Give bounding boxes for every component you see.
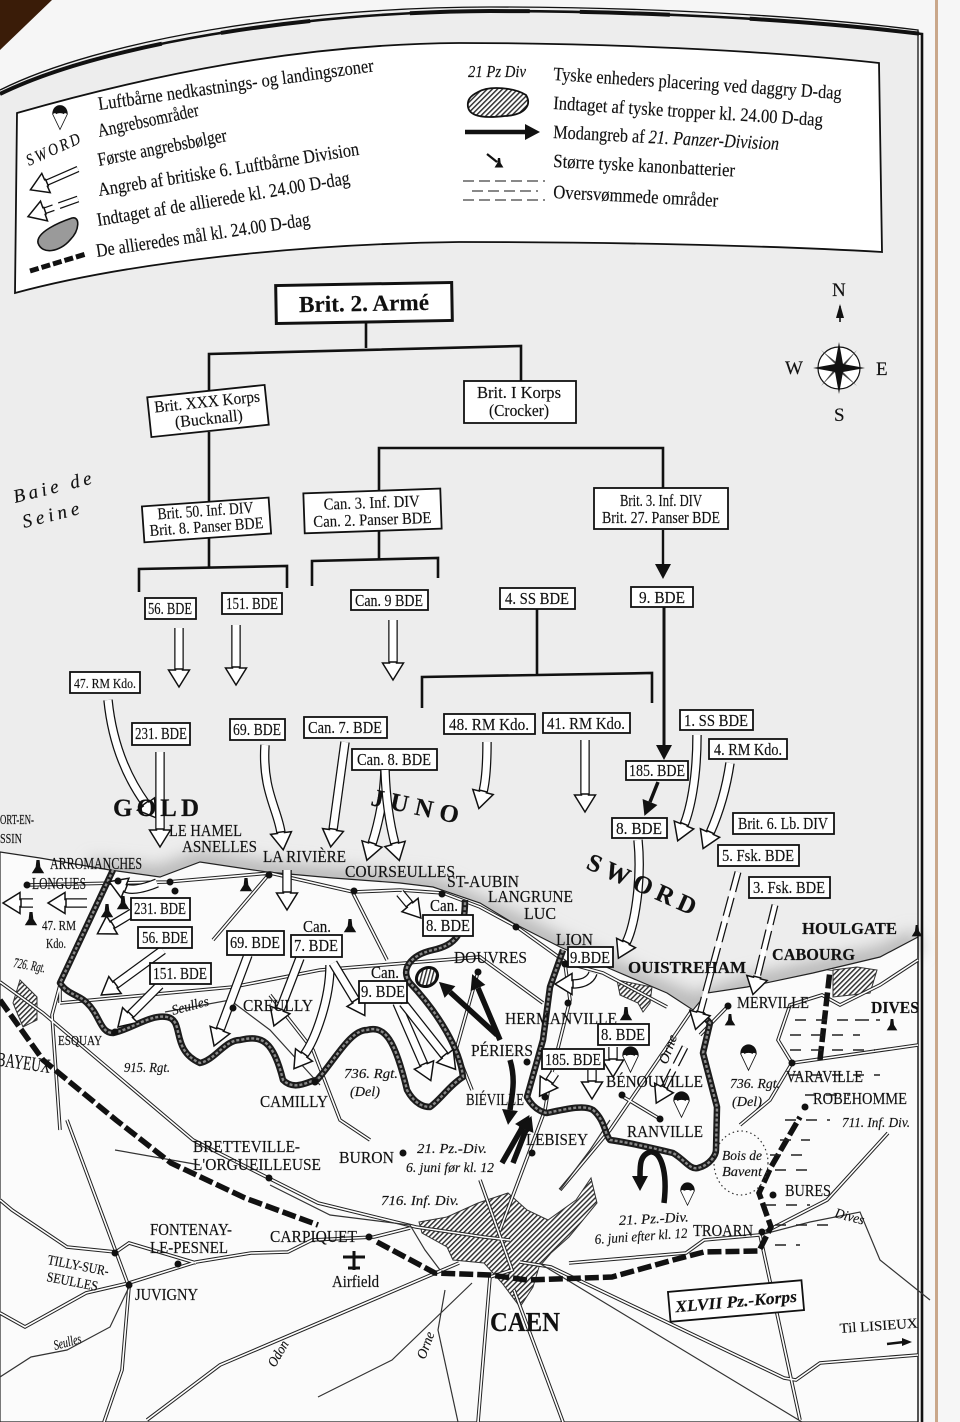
org box: Brit. I Korps: Brit. I Korps — [477, 383, 561, 402]
place names: BÉNOUVILLE — [606, 1072, 703, 1091]
place names: 47. RM — [42, 919, 76, 934]
place names: ESQUAY — [58, 1034, 102, 1049]
org box: Brit. 50. Inf. DIV — [142, 497, 271, 542]
place names: ST-AUBIN — [447, 872, 519, 891]
legend right texts — [553, 64, 843, 212]
legend unit label: 21 Pz Div — [468, 62, 527, 81]
unit and river italic labels: 6. juni før kl. 12 — [406, 1161, 494, 1176]
unit and river italic labels: 736. Rgt. — [344, 1067, 398, 1082]
unit boxes: upper brigades: 47. RM Kdo. — [74, 677, 136, 692]
unit and river italic labels: 21. Pz.-Div. — [417, 1142, 487, 1157]
sea name: Seine — [20, 497, 85, 533]
org box: Can. 3. Inf. DIV — [303, 489, 442, 533]
icon: dashed arrow legend — [44, 199, 78, 211]
place names: LANGRUNE — [488, 887, 573, 906]
place names: ORT-EN- — [0, 813, 34, 828]
enemy pocket: Douvres — [413, 964, 441, 990]
unit and river italic labels: Odon — [265, 1338, 292, 1370]
unit boxes: upper brigades: 5. Fsk. BDE — [722, 846, 794, 865]
unit boxes: upper brigades: 1. SS BDE — [684, 711, 748, 730]
unit and river italic labels: Orne — [657, 1033, 681, 1066]
unit and river italic labels: Seulles — [170, 994, 211, 1019]
unit boxes: upper brigades: 4. SS BDE — [505, 589, 569, 608]
unit boxes: upper brigades: 151. BDE — [226, 594, 278, 613]
towns hatch — [13, 964, 877, 1307]
legend right texts: Større tyske kanonbatterier — [553, 151, 736, 182]
legend left texts — [95, 55, 376, 262]
place names: HOULGATE — [802, 919, 897, 938]
place names: Can. — [303, 917, 331, 936]
beach names — [113, 784, 712, 926]
place names: CREULLY — [243, 996, 313, 1015]
place names: TROARN — [693, 1221, 753, 1240]
unit boxes: upper brigades: 69. BDE — [233, 720, 281, 739]
legend right texts: Modangreb af 21. Panzer-Division — [553, 122, 780, 155]
place names: CAMILLY — [260, 1092, 328, 1111]
map unit boxes — [131, 898, 649, 1069]
beach names: JUNO — [369, 784, 472, 832]
counterattack black arrows — [450, 782, 665, 1203]
compass letters: W — [785, 358, 803, 379]
org box: Brit. XXX Korps: (Bucknall) — [174, 405, 244, 431]
unit and river italic labels: 711. Inf. Div. — [842, 1116, 910, 1131]
icon: counterattack arrow legend — [465, 130, 525, 134]
place names: SEULLES — [45, 1270, 99, 1295]
XLVII Pz.-Korps box: XLVII Pz.-Korps — [673, 1287, 798, 1316]
compass letters: N — [832, 280, 846, 301]
org box: Brit. 3. Inf. DIV: Brit. 27. Panser BDE — [602, 508, 720, 527]
place names: LION — [556, 930, 593, 949]
place names — [0, 813, 919, 1337]
unit and river italic labels: Bois de — [722, 1149, 762, 1164]
unit and river italic labels: 6. juni efter kl. 12 — [594, 1227, 688, 1248]
org box: Brit. 2. Armé: Brit. 2. Armé — [299, 290, 429, 317]
place names: RANVILLE — [627, 1122, 703, 1141]
unit boxes: upper brigades: 41. RM Kdo. — [547, 714, 625, 733]
city: Caen — [419, 1178, 597, 1307]
map unit boxes: 185. BDE — [545, 1050, 601, 1069]
place names: PÉRIERS — [471, 1041, 533, 1060]
unit and river italic labels: Orne — [415, 1330, 438, 1361]
legend left texts: Angreb af britiske 6. Luftbårne Division — [96, 139, 361, 201]
map unit boxes: 7. BDE — [294, 936, 338, 955]
legend left texts: Luftbårne nedkastnings- og landingszoner — [97, 55, 376, 115]
unit and river italic labels: Bavent — [722, 1165, 763, 1180]
book cover corner — [0, 0, 52, 50]
place names: VARAVILLE — [786, 1067, 863, 1086]
unit and river italic labels: 736. Rgt. — [730, 1077, 780, 1092]
icon: flood legend — [463, 181, 545, 200]
place names: LA RIVIÈRE — [263, 847, 346, 866]
org box: Can. 3. Inf. DIV: Can. 2. Panser BDE — [313, 508, 432, 531]
coast shading — [90, 862, 918, 1005]
unit boxes: upper brigades: 3. Fsk. BDE — [753, 878, 825, 897]
map unit boxes: 69. BDE — [230, 933, 280, 952]
arrow: Brit. 3 to 9. BDE — [662, 530, 664, 564]
place names: ASNELLES — [182, 837, 257, 856]
place names: LUC — [524, 904, 556, 923]
unit boxes: upper brigades: 56. BDE — [148, 599, 192, 618]
place names: DOUVRES — [454, 948, 527, 967]
place names: CABOURG — [772, 945, 855, 964]
icon: enemy hatch legend — [468, 88, 528, 117]
unit and river italic labels: 716. Inf. Div. — [381, 1194, 459, 1209]
org chart connector lines — [139, 320, 663, 708]
unit boxes: upper brigades: 185. BDE — [629, 761, 685, 780]
allied objective line — [0, 970, 830, 1280]
unit and river italic labels: 21. Pz.-Div. — [618, 1210, 689, 1229]
XLVII Pz.-Korps box — [668, 1280, 804, 1322]
panel: sea — [0, 7, 918, 1030]
beachhead front: Gold and Juno — [60, 870, 465, 1107]
unit boxes: upper brigades: Can. 7. BDE — [308, 718, 382, 737]
unit boxes: upper brigades — [70, 587, 834, 898]
unit and river italic labels: Dives — [832, 1206, 866, 1229]
place names: OUISTREHAM — [628, 958, 746, 977]
map unit boxes: 151. BDE — [153, 964, 207, 983]
legend panel — [15, 43, 882, 293]
place names: COURSEULLES — [345, 862, 455, 881]
rivers and railways — [0, 1000, 930, 1422]
map unit boxes: 8. BDE — [601, 1025, 645, 1044]
place names: Kdo. — [46, 937, 66, 952]
Til Lisieux label — [839, 1317, 918, 1346]
map unit boxes: 9. BDE — [361, 982, 405, 1001]
gun batteries — [25, 860, 922, 1030]
unit boxes: upper brigades: 231. BDE — [135, 724, 187, 743]
place names: BIÉVILLE — [466, 1090, 524, 1109]
org box: Brit. 50. Inf. DIV: Brit. 8. Panser BDE — [149, 513, 264, 540]
legend left texts: Indtaget af de allierede kl. 24.00 D-dag — [95, 168, 352, 231]
legend left texts: Første angrebsbølger — [96, 125, 229, 171]
org box: Brit. 3. Inf. DIV — [594, 488, 728, 529]
org box: Brit. XXX Korps: Brit. XXX Korps — [153, 387, 261, 417]
airborne dashed arrows — [664, 872, 775, 1088]
arrow: 9. BDE to 185. BDE — [662, 607, 666, 745]
unit and river italic labels: (Del) — [350, 1085, 380, 1100]
icon: parachute legend — [53, 106, 67, 130]
place names: ROBEHOMME — [813, 1089, 907, 1108]
unit boxes: upper brigades: 8. BDE — [616, 819, 662, 838]
legend right texts: Tyske enheders placering ved daggry D-dag — [553, 64, 843, 104]
legend left texts: Angrebsområder — [96, 100, 201, 142]
compass letters: E — [876, 359, 888, 380]
place names: Can. — [430, 896, 458, 915]
map unit boxes: 231. BDE — [134, 899, 186, 918]
unit and river italic labels: (Del) — [732, 1095, 762, 1110]
assault arrows upper — [108, 620, 730, 943]
icon: gun legend — [487, 154, 503, 167]
unit and river italic labels: 726. Rgt. — [12, 956, 46, 976]
legend sword label: SWORD — [23, 128, 85, 170]
panel: land — [0, 852, 918, 1422]
org box: Brit. I Korps: (Crocker) — [489, 401, 549, 420]
sea name: Baie de — [11, 467, 98, 508]
place names: FONTENAY- — [150, 1220, 232, 1239]
place names: BURON — [339, 1148, 394, 1167]
place names: BURES — [785, 1181, 831, 1200]
map unit boxes: 9.BDE — [570, 948, 610, 967]
org box: Brit. XXX Korps — [147, 385, 269, 437]
unit and river italic labels — [12, 956, 910, 1370]
beachhead front: Sword — [527, 950, 717, 1168]
place names: CARPIQUET — [270, 1227, 357, 1246]
roads — [0, 873, 918, 1422]
legend right texts: Indtaget af tyske tropper kl. 24.00 D-dag — [553, 93, 824, 131]
legend right texts: Oversvømmede områder — [553, 182, 719, 212]
city: Bayeux — [13, 980, 37, 1027]
unit boxes: upper brigades: 48. RM Kdo. — [449, 715, 529, 734]
place names: DIVES — [871, 998, 919, 1017]
place names: TILLY-SUR- — [46, 1253, 110, 1280]
icon: white arrow legend — [46, 169, 78, 183]
org box: Brit. I Korps — [464, 381, 576, 423]
map unit boxes: 8. BDE — [426, 916, 470, 935]
beach names: GOLD — [113, 795, 205, 822]
org box: Brit. 3. Inf. DIV: Brit. 3. Inf. DIV — [620, 491, 702, 510]
place names: Airfield — [332, 1272, 380, 1291]
place names: LEBISEY — [526, 1130, 588, 1149]
beach names: SWORD — [583, 849, 712, 926]
sea name — [11, 467, 98, 533]
unit and river italic labels: Seulles — [52, 1332, 83, 1354]
unit boxes: upper brigades: Can. 8. BDE — [357, 750, 431, 769]
parachutes on map — [623, 1045, 756, 1205]
place names: BRETTEVILLE- — [193, 1137, 300, 1156]
place names: LE-PESNEL — [150, 1238, 228, 1257]
place names: CAEN — [490, 1307, 560, 1337]
assault arrows on the map — [20, 870, 613, 1082]
place names: SSIN — [0, 832, 22, 847]
place names: Can. — [371, 963, 399, 982]
org box: Can. 3. Inf. DIV: Can. 3. Inf. DIV — [323, 491, 420, 514]
place names: ARROMANCHES — [50, 854, 142, 873]
place names: MERVILLE — [737, 993, 809, 1012]
compass letters: S — [834, 405, 845, 426]
compass — [785, 280, 888, 426]
Til Lisieux label: Til LISIEUX — [839, 1317, 918, 1337]
unit boxes: upper brigades: 9. BDE — [639, 588, 685, 607]
org box: Brit. 50. Inf. DIV: Brit. 50. Inf. DIV — [157, 498, 254, 523]
place names: HERMANVILLE — [505, 1009, 617, 1028]
flooded areas — [765, 1020, 880, 1245]
place names: LE HAMEL — [169, 821, 242, 840]
icon: airfield plane — [343, 1251, 365, 1270]
unit boxes: upper brigades: Can. 9 BDE — [355, 591, 423, 610]
town dots — [24, 872, 808, 1288]
unit boxes: upper brigades: 4. RM Kdo. — [714, 740, 782, 759]
icon: objective blob legend — [38, 218, 78, 251]
compass letters — [785, 280, 888, 426]
place names: L'ORGUEILLEUSE — [193, 1155, 321, 1174]
legend left texts: De allieredes mål kl. 24.00 D-dag — [95, 209, 312, 262]
icon: dashed objective legend — [30, 254, 86, 271]
Bois de Bavent woodland — [714, 1131, 768, 1195]
unit boxes: upper brigades: Brit. 6. Lb. DIV — [738, 814, 828, 833]
book edge — [935, 0, 938, 1422]
place names: JUVIGNY — [135, 1285, 198, 1304]
org box: Brit. 2. Armé — [276, 282, 452, 324]
city: Cabourg — [833, 967, 877, 997]
unit and river italic labels: 915. Rgt. — [124, 1061, 170, 1076]
city: Ouistreham — [617, 980, 652, 1012]
map unit boxes: 56. BDE — [142, 928, 188, 947]
place names: LONGUES — [32, 874, 86, 893]
